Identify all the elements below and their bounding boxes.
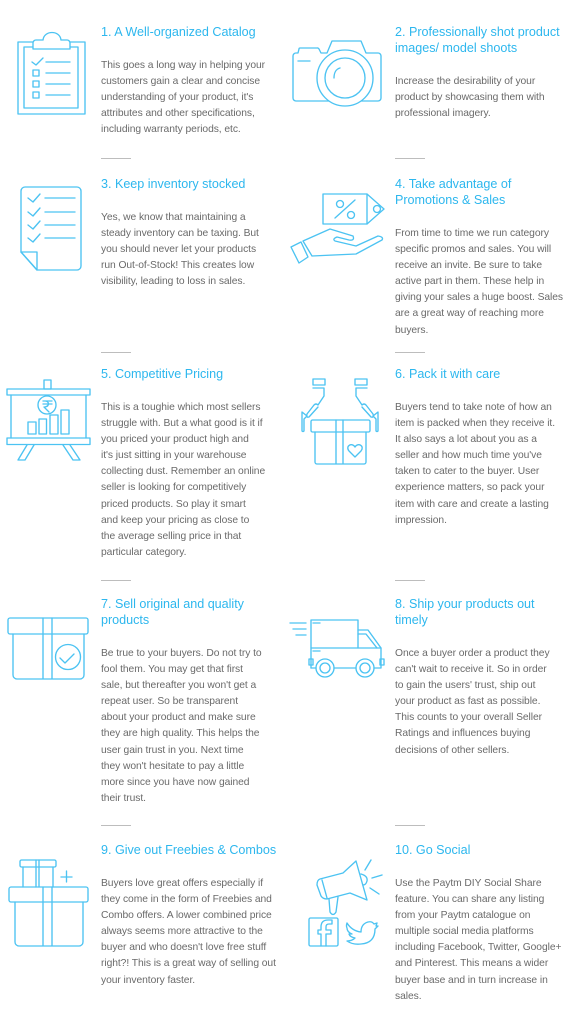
text 9: they come in the form of Freebies and: [101, 894, 272, 905]
text 9: always seems more attractive to the: [101, 926, 263, 937]
text 7: repeat user. So be transparent: [101, 696, 238, 707]
heading 7: 7. Sell original and quality: [101, 597, 244, 611]
text 7: about your product and make sure: [101, 712, 256, 723]
text 1: attributes and other specifications,: [101, 108, 255, 119]
text 7: user gain trust in you. Next time: [101, 745, 243, 756]
text 4: active part in them. These help in: [395, 276, 544, 287]
text 2: product by showcasing them with: [395, 92, 544, 103]
text 5: you priced your product high and: [101, 434, 249, 445]
icon: box with check mark: [8, 618, 88, 679]
icon: clipboard: [18, 32, 85, 114]
heading 4: 4. Take advantage of: [395, 177, 511, 191]
heading 2: 2. Professionally shot product: [395, 25, 560, 39]
text 9: Combo offers. A lower combined price: [101, 910, 272, 921]
text 8: [395, 648, 550, 756]
text 7: they are high quality. This helps the: [101, 728, 259, 739]
text 8: decisions of other sellers.: [395, 745, 509, 756]
heading 10: 10. Go Social: [395, 843, 470, 857]
text 1: customers gain a clear and concise: [101, 76, 260, 87]
icon: camera: [293, 41, 381, 106]
icon: checklist document: [21, 187, 81, 270]
heading 8: [395, 597, 535, 627]
text 10: sales.: [395, 991, 421, 1002]
text 3: run Out-of-Stock! This creates low: [101, 260, 254, 271]
text 6: It also says a lot about you as a: [395, 434, 537, 445]
text 5: [101, 402, 265, 558]
heading 3: 3. Keep inventory stocked: [101, 177, 245, 191]
heading 4: [395, 177, 512, 207]
text 2: [395, 76, 544, 119]
text 1: including warranty periods, etc.: [101, 124, 241, 135]
heading 5: 5. Competitive Pricing: [101, 367, 223, 381]
text 7: their trust.: [101, 793, 146, 804]
text 4: [395, 228, 563, 336]
icon: delivery truck: [290, 620, 384, 677]
text 5: seller is looking for competitively: [101, 482, 246, 493]
text 10: feature. You can share any listing: [395, 894, 544, 905]
text 6: taken to cater to the buyer. User: [395, 466, 539, 477]
text 7: fool them. You may get that first: [101, 664, 243, 675]
text 8: Once a buyer order a product they: [395, 648, 550, 659]
heading 2: images/ model shoots: [395, 41, 517, 55]
heading 7: [101, 597, 244, 627]
heading 2: [395, 25, 560, 55]
text 6: impression.: [395, 515, 447, 526]
icon: price tag and hand: [291, 194, 384, 263]
text 9: your inventory faster.: [101, 975, 195, 986]
text 2: professional imagery.: [395, 108, 491, 119]
text 8: This counts to your overall Seller: [395, 712, 542, 723]
text 7: [101, 648, 262, 804]
text 10: including Facebook, Twitter, Google+: [395, 942, 561, 953]
text 3: Yes, we know that maintaining a: [101, 212, 246, 223]
text 6: experience matters, so pack your: [395, 482, 544, 493]
text 1: [101, 60, 265, 135]
text 4: buyers.: [395, 325, 428, 336]
icon: stacked gift boxes: [9, 860, 88, 946]
text 7: they won't hesitate to pay a little: [101, 761, 244, 772]
text 6: [395, 402, 555, 526]
icon: megaphone with facebook and twitter: [309, 860, 382, 946]
heading 8: 8. Ship your products out: [395, 597, 535, 611]
icon: hands and gift box: [302, 379, 378, 464]
text 7: Be true to your buyers. Do not try to: [101, 648, 262, 659]
text 3: you should never let your products: [101, 244, 256, 255]
text 3: steady inventory can be taxing. But: [101, 228, 259, 239]
text 5: the average selling price in that: [101, 531, 241, 542]
heading 1: 1. A Well-organized Catalog: [101, 25, 256, 39]
text 4: are a great way of reaching more: [395, 308, 544, 319]
text 9: Buyers love great offers especially if: [101, 878, 263, 889]
text 4: receive an invite. Be sure to take: [395, 260, 542, 271]
text 8: to gain the users' trust, ship out: [395, 680, 535, 691]
text 4: specific promos and sales. You will: [395, 244, 551, 255]
text 1: understanding of your product, it's: [101, 92, 253, 103]
text 3: [101, 212, 259, 287]
text 6: item is packed when they receive it.: [395, 418, 555, 429]
text 6: seller and how much time you've: [395, 450, 542, 461]
heading 7: products: [101, 613, 149, 627]
heading 8: timely: [395, 613, 428, 627]
text 7: more since you have now gained: [101, 777, 249, 788]
text 3: visibility, leading to loss in sales.: [101, 276, 245, 287]
text 4: giving your sales a huge boost. Sales: [395, 292, 563, 303]
text 10: [395, 878, 561, 1002]
text 5: This is a toughie which most sellers: [101, 402, 260, 413]
text 9: buyer and who doesn't love free stuff: [101, 942, 266, 953]
heading 4: Promotions & Sales: [395, 193, 505, 207]
text 10: multiple social media platforms: [395, 926, 534, 937]
text 4: From time to time we run category: [395, 228, 549, 239]
text 6: Buyers tend to take note of how an: [395, 402, 552, 413]
text 5: collecting dust. Remember an online: [101, 466, 265, 477]
heading 6: 6. Pack it with care: [395, 367, 500, 381]
text 10: and Pinterest. This means a wider: [395, 958, 548, 969]
text 1: This goes a long way in helping your: [101, 60, 265, 71]
heading 9: 9. Give out Freebies & Combos: [101, 843, 276, 857]
text 5: priced products. So play it smart: [101, 499, 246, 510]
text 9: [101, 878, 276, 986]
icon: presentation board with rupee chart: [7, 380, 90, 460]
text 8: can't wait to receive it. So in order: [395, 664, 547, 675]
text 5: and keep your pricing as close to: [101, 515, 249, 526]
text 5: it's just sitting in your warehouse: [101, 450, 246, 461]
text 10: from your Paytm catalogue on: [395, 910, 530, 921]
text 5: particular category.: [101, 547, 186, 558]
text 2: Increase the desirability of your: [395, 76, 535, 87]
text 5: struggle with. But a what good is it if: [101, 418, 263, 429]
text 9: right?! This is a great way of selling out: [101, 958, 276, 969]
text 8: your product as fast as possible.: [395, 696, 540, 707]
text 10: Use the Paytm DIY Social Share: [395, 878, 542, 889]
text 8: Ratings and influences buying: [395, 728, 530, 739]
text 6: item with care and create a lasting: [395, 499, 549, 510]
text 10: buyer base and in turn increase in: [395, 975, 548, 986]
text 7: sale, but thereafter you won't get a: [101, 680, 256, 691]
